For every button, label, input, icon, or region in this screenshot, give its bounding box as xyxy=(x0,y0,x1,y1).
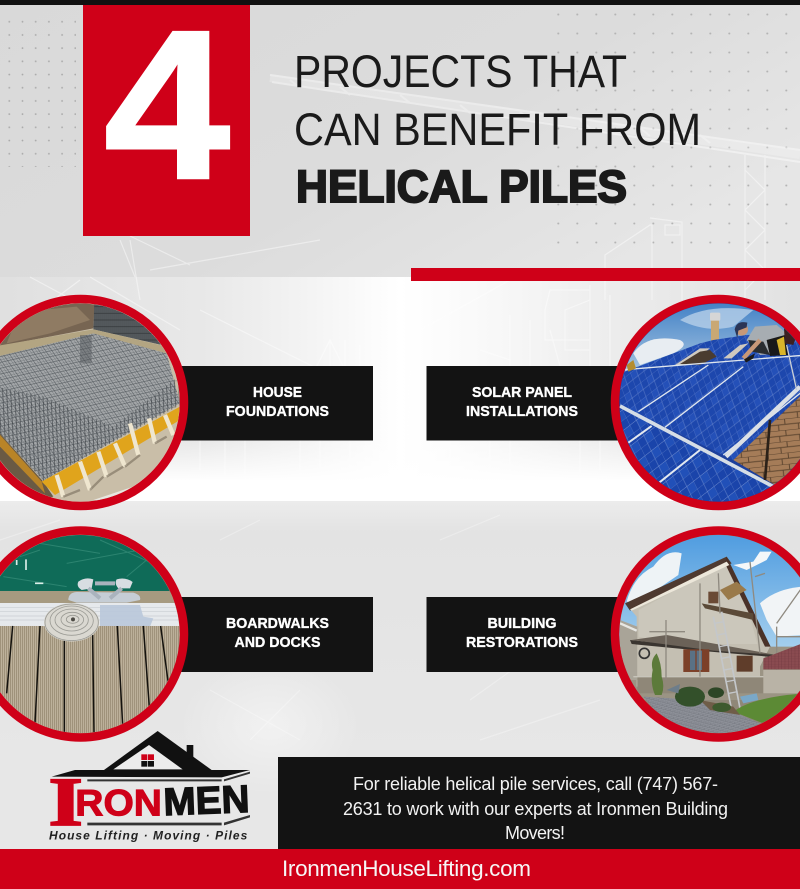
label bar: building restorations: BUILDING xyxy=(488,616,556,632)
logo xyxy=(48,731,250,842)
title xyxy=(294,46,701,212)
call to action panel: 2631 to work with our experts at Ironmen Building xyxy=(343,799,728,819)
label bar: boardwalks and docks: BOARDWALKS xyxy=(226,616,329,632)
label bar: solar panel installations: SOLAR PANEL xyxy=(472,385,572,401)
label bar: solar panel installations: INSTALLATIONS xyxy=(466,404,578,420)
photo: house foundation rebar xyxy=(0,299,184,507)
photo: building under restoration xyxy=(613,530,800,738)
logo wordmark: MEN xyxy=(163,778,250,824)
logo wordmark: RON xyxy=(75,781,162,823)
call to action panel xyxy=(278,757,800,849)
title: CAN BENEFIT FROM xyxy=(294,104,701,155)
label bar: house foundations: HOUSE xyxy=(253,385,302,401)
label bar: boardwalks and docks: AND DOCKS xyxy=(234,635,321,651)
label bar: solar panel installations xyxy=(426,366,620,440)
logo tagline: House Lifting · Moving · Piles xyxy=(49,828,248,842)
photo: boardwalk dock with rope xyxy=(0,530,184,738)
footer website bar xyxy=(0,849,800,889)
logo roof icon xyxy=(52,731,250,825)
label bar: house foundations: FOUNDATIONS xyxy=(226,404,329,420)
title: PROJECTS THAT xyxy=(294,46,627,97)
red number panel xyxy=(83,0,250,236)
label bar: building restorations xyxy=(426,597,620,672)
red accent bar xyxy=(411,268,800,281)
label bar: house foundations xyxy=(180,366,373,440)
title: HELICAL PILES xyxy=(296,161,627,212)
label bar: boardwalks and docks xyxy=(180,597,373,672)
logo wordmark xyxy=(48,763,250,840)
top black bar xyxy=(0,0,800,5)
footer website bar: IronmenHouseLifting.com xyxy=(282,856,531,881)
call to action panel: Movers! xyxy=(505,823,565,843)
logo wordmark: I xyxy=(48,763,83,840)
photo: solar panels on roof xyxy=(613,299,800,507)
call to action panel: For reliable helical pile services, call (747) 567- xyxy=(353,774,718,794)
label bar: building restorations: RESTORATIONS xyxy=(466,635,578,651)
